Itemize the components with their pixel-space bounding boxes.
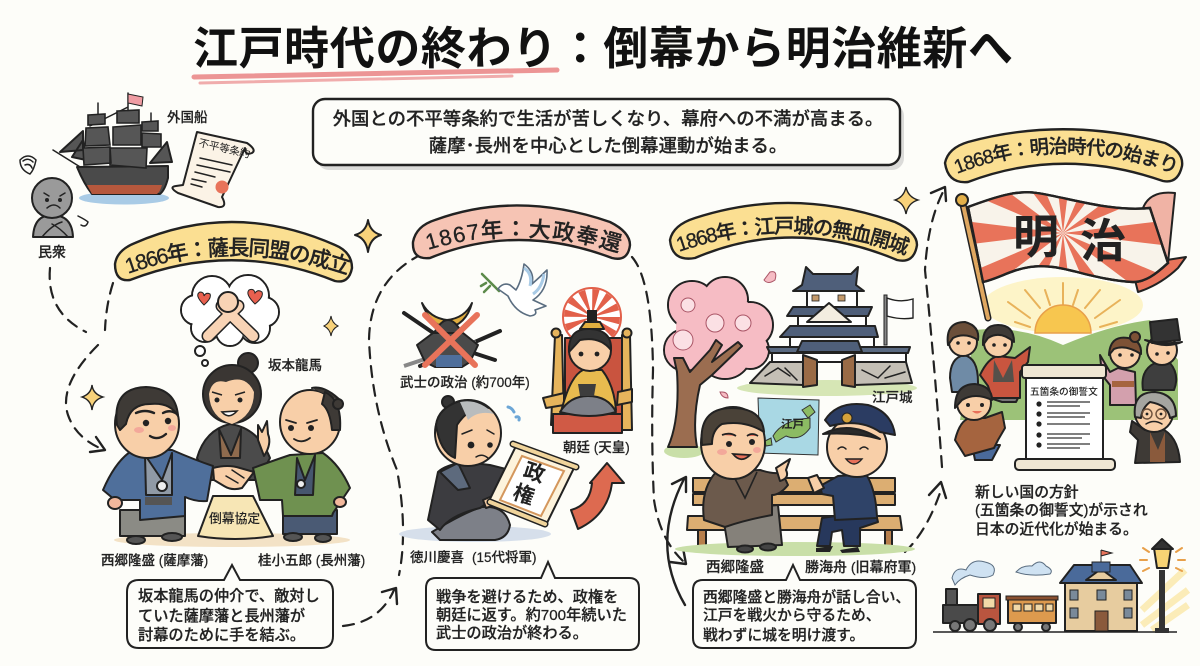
icon: map of Japan [758,398,819,455]
scene: Satsuma-Choshu alliance figures [103,353,350,547]
document: power scroll: 政 [521,459,548,487]
figure: Tokugawa Yoshinobu [399,396,551,542]
arrow: power returned [571,463,624,529]
figure: older man with glasses [1130,392,1180,463]
label: Sakamoto Ryoma: 坂本龍馬 [268,357,322,373]
figure: Emperor on throne [543,288,632,433]
callout: 1866: 討幕のために手を結ぶ。 [138,627,305,644]
arrow: commoners to 1866 [50,268,113,452]
callout: 1868 Edo: 戦わずに城を明け渡す。 [703,627,864,644]
banner: 1866 [114,220,354,283]
intro text box: 外国との不平等条約で生活が苦しくなり、幕府への不満が高まる。 [333,108,883,129]
banner: 1868 Meiji: 1868年：明治時代の始まり [954,136,1176,174]
icon: handshake [213,466,254,489]
illustration: Meiji flag [955,191,1187,322]
banner: 1867: 1867年：大政奉還 [426,218,622,254]
banner: 1867 [412,204,632,260]
label: Imperial court: 朝廷 (天皇) [563,439,630,455]
text: new national policy: (五箇条の御誓文)が示され [975,501,1148,519]
document: power scroll: 権 [510,481,537,509]
icon: peace dove [481,264,547,316]
label: commoners: 民衆 [38,244,66,260]
callout: 1866 [127,565,333,648]
icon: samurai armour crossed out [404,303,500,367]
document: alliance agreement: 倒幕協定 [209,511,260,526]
illustration: Western-style school [1060,550,1142,631]
figure: Sakamoto Ryoma [197,353,270,480]
figure: Katsura Kogoro (green) [253,388,350,542]
text: new national policy [975,484,1148,538]
arrow: 1867 to 1868 [632,257,686,605]
label: Saigo Takamori (Satsuma): 西郷隆盛 (薩摩藩) [101,552,208,568]
illustration: cherry tree [664,272,776,458]
figure: woman in pink [1100,332,1141,405]
banner: 1866: 1866年：薩長同盟の成立 [126,236,350,276]
intro text box [313,99,904,170]
callout: 1866: 坂本龍馬の仲介で、敵対し [138,588,320,605]
document: power scroll [488,444,576,525]
document: Charter Oath scroll: 五箇条の御誓文 [1030,385,1098,398]
illustration: Meiji flag: 明 [1013,211,1059,263]
illustration: steam train [933,589,1177,632]
document: alliance agreement [198,496,273,539]
callout: 1868 Edo: 西郷隆盛と勝海舟が話し合い、 [703,588,910,606]
figure: man in top hat [1142,319,1182,390]
figures: Meiji crowd [948,319,1182,463]
icon: troubled commoner [20,156,88,237]
figure: Saigo Takamori (blue) [103,387,213,544]
illustration: street lamp [1140,539,1185,633]
illustration: clouds and lamp glow [952,561,1188,630]
text: new national policy: 日本の近代化が始まる。 [975,520,1138,538]
label: Edo Castle: 江戸城 [872,390,913,405]
illustration: sunrise over hills [960,277,1178,420]
icon: treaty scroll: 不平等条約 [197,136,251,161]
callout: 1868 Edo [693,565,916,648]
illustration: Edo castle [737,267,917,396]
icon: map of Japan: 江戸 [781,418,804,431]
label: Katsu Kaishu (former shogunate): 勝海舟 (旧幕府軍) [805,559,916,575]
figure: man in red [980,325,1030,402]
figure: Saigo Takamori (brown) [701,407,790,552]
figure: man in brown [955,384,1005,460]
arrow: 1866 to 1867 [343,254,422,626]
decorative stars [82,187,918,410]
title: 江戸時代の終わり：倒幕から明治維新へ [193,23,1013,74]
icon: treaty scroll [172,132,254,207]
callout: 1866: ていた薩摩藩と長州藩が [138,607,305,625]
banner: 1868 Edo Castle: 1868年：江戸城の無血開城 [677,216,910,256]
label: Yoshinobu: 徳川慶喜 [410,550,464,565]
thought bubble: alliance [181,275,279,366]
text: new national policy: 新しい国の方針 [975,484,1079,501]
icon: foreign ship [53,93,172,204]
label: Katsura Kogoro (Choshu): 桂小五郎 (長州藩) [258,553,365,568]
label: Saigo Takamori: 西郷隆盛 [706,558,764,576]
document: Charter Oath scroll [1015,365,1115,470]
label: 15th shogun: (15代将軍) [472,550,537,565]
label: samurai rule: 武士の政治 (約700年) [400,374,530,390]
callout: 1868 Edo: 江戸を戦火から守るため、 [703,607,881,624]
arrow: 1868 to Meiji [905,187,946,552]
figure: man in blue [948,322,978,392]
figure: Katsu Kaishu [808,404,895,553]
illustration: Meiji flag: 治 [1080,215,1126,267]
label: foreign ship: 外国船 [167,109,208,125]
callout: 1867 [426,562,639,650]
callout: 1867: 朝廷に返す。約700年続いた [436,606,627,624]
callout: 1867: 武士の政治が終わる。 [436,624,588,642]
illustration: bench [675,478,915,556]
callout: 1867: 戦争を避けるため、政権を [436,589,618,606]
intro text box: 薩摩･長州を中心とした倒幕運動が始まる。 [429,135,787,156]
